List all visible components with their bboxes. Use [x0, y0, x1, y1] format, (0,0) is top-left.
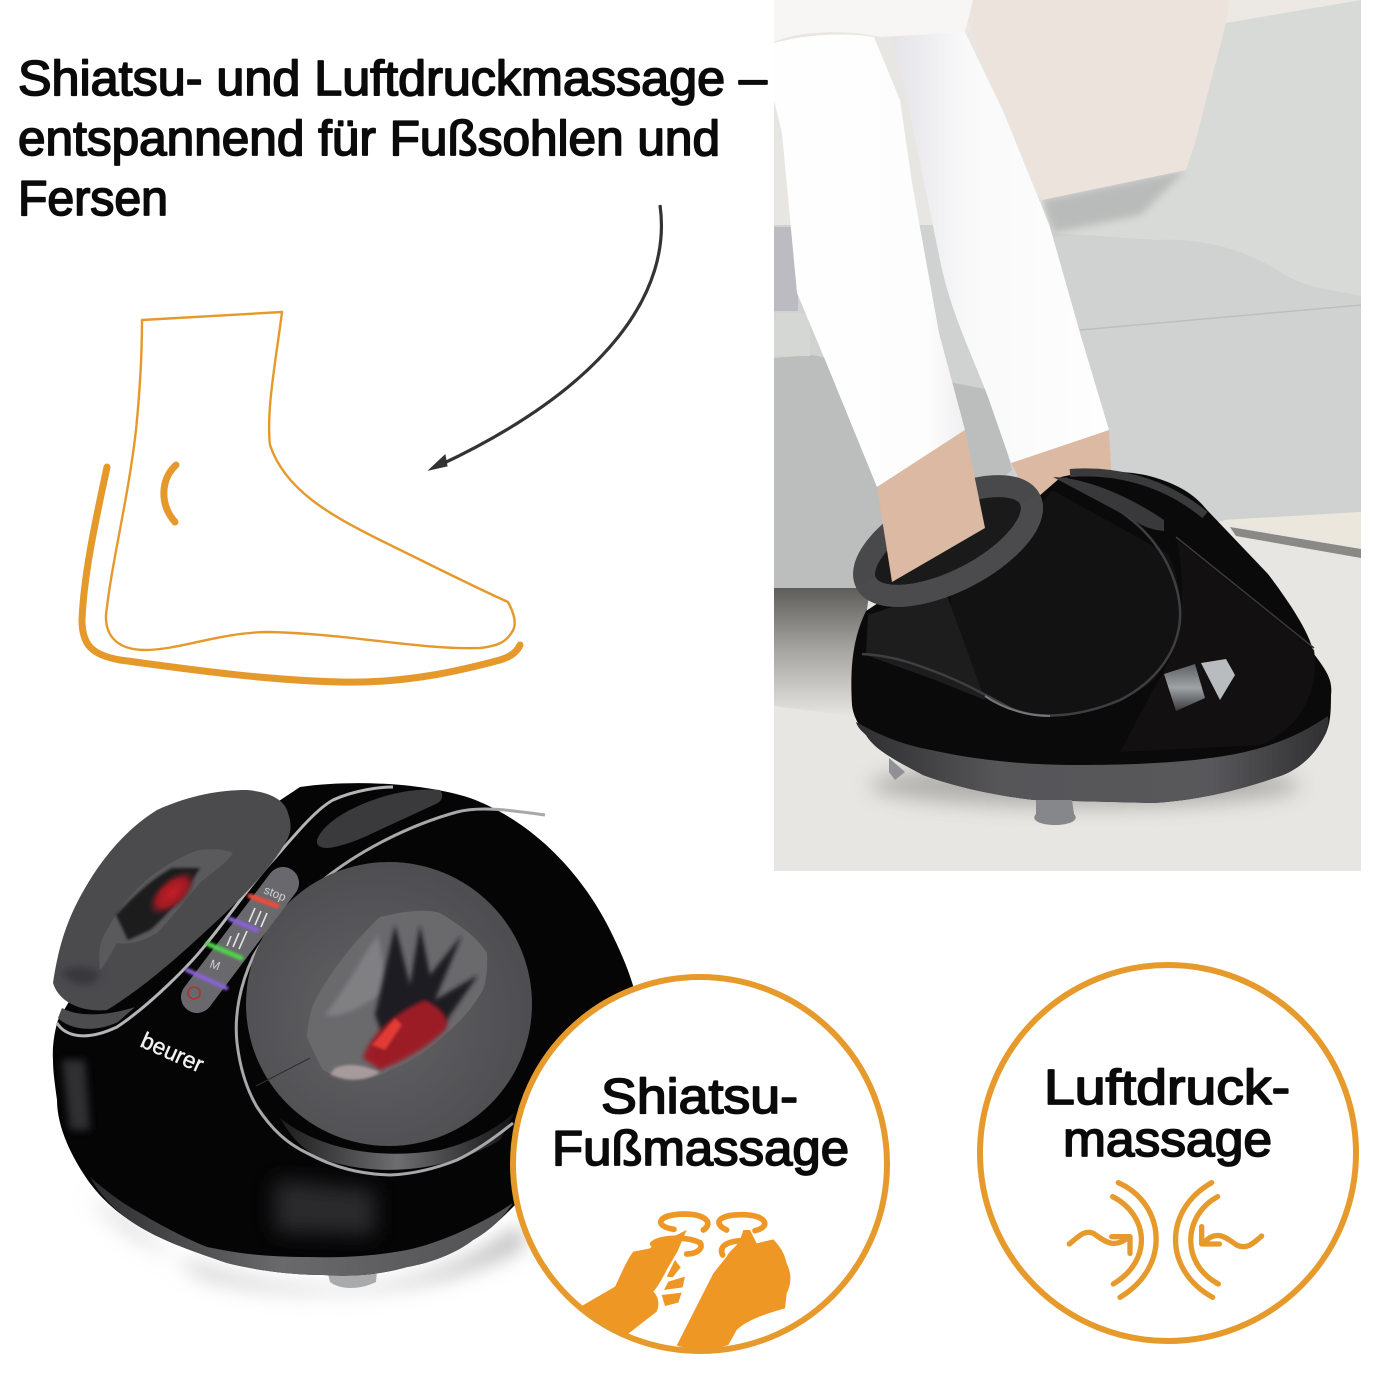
heat bars	[249, 908, 267, 927]
sofa backrest	[1042, 0, 1361, 225]
bright red fold	[372, 1018, 402, 1050]
back leg trousers	[890, 32, 1109, 463]
body sheen left	[62, 1060, 90, 1130]
massager body	[851, 472, 1331, 803]
right opening dark folds	[375, 925, 478, 1055]
right line	[1176, 537, 1314, 648]
heading: Shiatsu- und Luftdruckmassage –	[18, 52, 768, 106]
massager shadow	[870, 763, 1300, 807]
right opening light folds	[325, 935, 388, 1016]
LED red	[250, 896, 277, 906]
floor plate	[1222, 512, 1358, 521]
LED green	[208, 944, 241, 958]
side foot	[889, 758, 905, 780]
body sheen centre	[275, 1180, 375, 1235]
collar ring	[853, 475, 1043, 607]
heel pressure line	[82, 467, 520, 682]
badge text: Shiatsu-	[601, 1070, 798, 1124]
rear collar	[1070, 472, 1205, 515]
stop label: stop	[262, 883, 288, 904]
sofa front left	[774, 355, 1012, 590]
badge: Luftdruckmassage: massage	[1063, 1113, 1272, 1167]
icon: air pressure waves and arrows	[1069, 1183, 1262, 1297]
silver trim left	[57, 787, 393, 1036]
badge: Shiatsu-Fußmassage	[513, 977, 887, 1351]
photo: person using the foot massager on a sofa	[774, 0, 1361, 871]
right panel	[1312, 648, 1315, 655]
base band	[90, 1177, 513, 1276]
seat fold	[800, 355, 810, 356]
left dark gap	[774, 227, 798, 311]
product photo: Beurer foot massager	[53, 783, 640, 1292]
side panel sheen	[866, 590, 985, 700]
shirt	[774, 0, 973, 42]
soft drop shadow	[90, 1195, 525, 1292]
badge ring	[513, 977, 887, 1351]
badge: Shiatsu-Fußmassage: Fußmassage	[552, 1122, 849, 1176]
window reflection right	[1201, 659, 1235, 700]
backrest shadow	[1042, 170, 1186, 233]
front foot skin	[877, 430, 985, 582]
floor plate strip	[1230, 527, 1361, 558]
foot illustration	[82, 312, 520, 682]
level bars	[227, 931, 247, 949]
round panel	[950, 490, 1180, 715]
pad lower crescent	[280, 1112, 515, 1170]
cushion	[1041, 31, 1224, 200]
window reflection	[1164, 664, 1205, 711]
right red glow	[363, 1000, 447, 1070]
power icon	[188, 987, 200, 999]
right pad	[246, 862, 532, 1146]
product dome body	[53, 783, 640, 1276]
left pad shadow	[60, 967, 102, 985]
ankle arc	[164, 465, 176, 522]
heading: entspannend für Fußsohlen und	[18, 112, 720, 166]
trim highlight	[862, 478, 1180, 716]
trim bright part	[985, 696, 1050, 716]
badge text: Luftdruck-	[1044, 1061, 1290, 1115]
LED violet	[187, 970, 226, 988]
top oval	[1053, 477, 1164, 531]
badge ring	[980, 965, 1356, 1341]
sofa seat	[774, 225, 1361, 522]
control panel	[197, 883, 283, 997]
wall behind sofa	[774, 0, 1361, 30]
sofa shadow	[774, 588, 870, 716]
pad seam	[256, 1058, 310, 1086]
heading	[18, 52, 768, 226]
left opening dark	[116, 868, 200, 940]
rubber foot	[327, 1270, 377, 1288]
foot outline	[106, 312, 515, 650]
right opening fabric	[307, 911, 487, 1079]
collar ring front	[866, 499, 1048, 618]
M label: M	[208, 957, 222, 973]
heading: Fersen	[18, 172, 168, 226]
pale fabric lower	[330, 1065, 380, 1080]
badge: Luftdruckmassage	[980, 965, 1356, 1341]
top oval	[317, 789, 442, 848]
left opening fabric	[99, 849, 233, 970]
seat seam	[1080, 305, 1361, 330]
silver trim right	[236, 809, 545, 1175]
LED violet	[230, 919, 257, 930]
arrow pointing to the foot sole	[429, 205, 661, 470]
massager foot	[1034, 800, 1076, 825]
front leg trousers	[774, 35, 965, 487]
left collar opening pad	[53, 790, 291, 1010]
left red glow	[140, 862, 204, 924]
back foot skin	[1011, 430, 1112, 500]
massager base band	[856, 716, 1328, 803]
collar lip	[58, 1007, 135, 1029]
icon: hands pressing with thumbs	[582, 1214, 790, 1349]
brand name: beurer	[137, 1027, 208, 1078]
